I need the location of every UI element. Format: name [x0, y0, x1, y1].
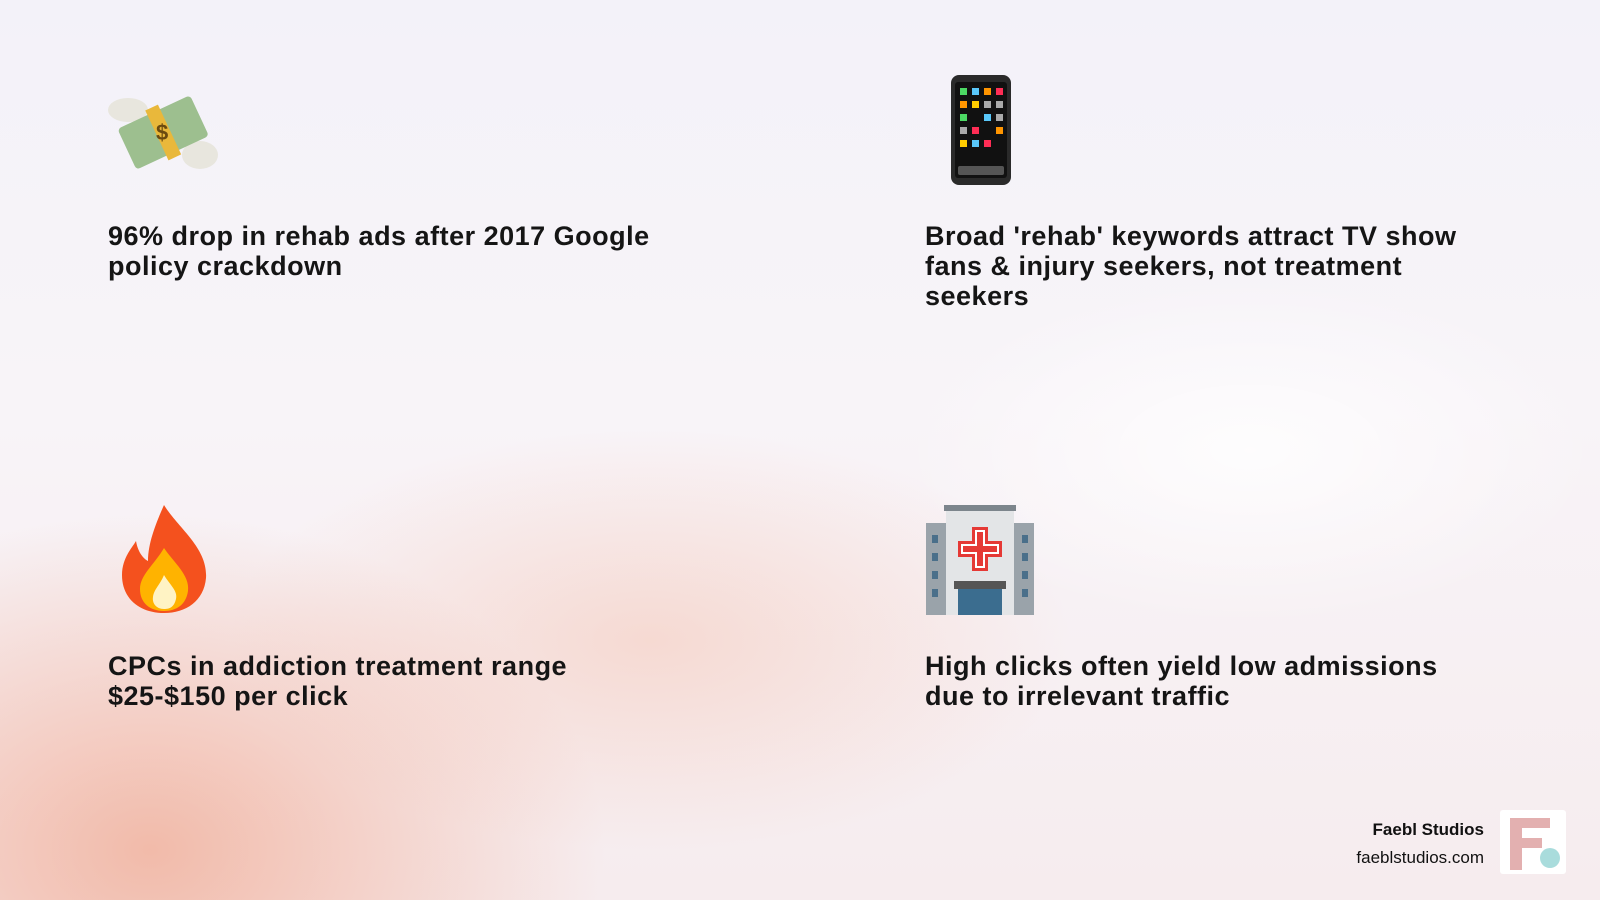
icon: hospital	[926, 505, 1034, 615]
brand text	[1356, 820, 1484, 867]
logo	[1500, 810, 1566, 874]
brand text: Faebl Studios	[1373, 820, 1484, 839]
brand text: faeblstudios.com	[1356, 848, 1484, 867]
heading: broad rehab keywords: Broad 'rehab' keywords attract TV show fans & injury seekers, not treatment seekers	[925, 221, 1456, 311]
icon: mobile phone	[951, 75, 1011, 185]
icon: money with wings: $	[156, 120, 168, 145]
icon: money with wings	[108, 96, 218, 169]
heading: CPCs: CPCs in addiction treatment range $25-$150 per click	[108, 651, 567, 711]
heading: high clicks: High clicks often yield low admissions due to irrelevant traffic	[925, 651, 1438, 711]
heading: 96% drop: 96% drop in rehab ads after 2017 Google policy crackdown	[108, 221, 650, 281]
brand footer	[1356, 810, 1566, 874]
icon: fire	[122, 505, 206, 613]
